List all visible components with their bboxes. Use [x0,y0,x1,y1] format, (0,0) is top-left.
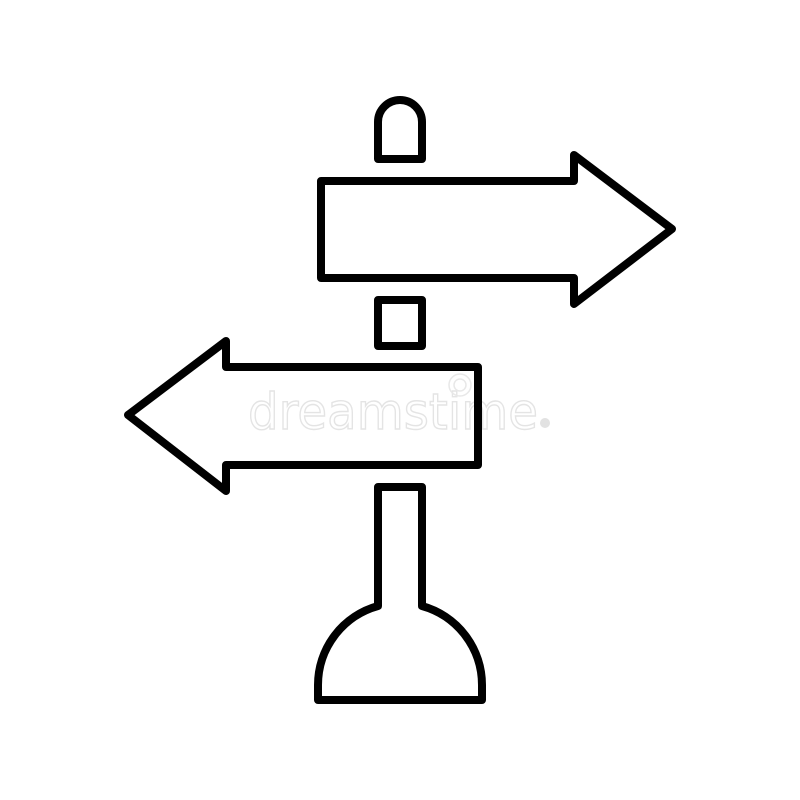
watermark: dreamstime [248,383,538,441]
arrow: right sign [321,155,672,304]
icon: post cap [378,100,422,159]
icon: post base [318,487,482,700]
arrow: left sign [128,341,478,491]
icon: post middle segment [378,300,422,346]
